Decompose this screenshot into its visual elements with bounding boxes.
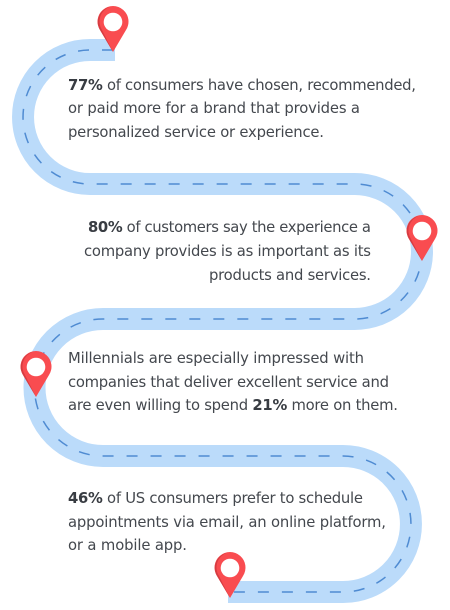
text block: 46% of US consumers: or a mobile app. <box>68 537 187 554</box>
text block: 77% of consumers: personalized service or experience. <box>68 124 324 141</box>
text block: 46% of US consumers <box>68 490 386 554</box>
text block: 46% of US consumers: 46% of US consumers prefer to schedule <box>68 490 363 507</box>
text block: 80% of customers: company provides is as important as its <box>84 243 371 260</box>
text block: 80% of customers: products and services. <box>209 267 371 284</box>
text block: 46% of US consumers: appointments via email, an online platform, <box>68 514 386 531</box>
text block: Millennials: companies that deliver excellent service and <box>68 374 389 391</box>
text block: Millennials: Millennials are especially impressed with <box>68 350 364 367</box>
icon: map pin 3 <box>20 351 52 397</box>
icon: map pin 2 <box>406 215 438 261</box>
text block: 80% of customers: 80% of customers say the experience a <box>88 219 371 236</box>
text block: Millennials: are even willing to spend 21% more on them. <box>68 397 398 414</box>
icon: map pin 4 <box>214 552 246 598</box>
text block: 77% of consumers: 77% of consumers have chosen, recommended, <box>68 77 416 94</box>
text block: 77% of consumers: or paid more for a brand that provides a <box>68 100 360 117</box>
text block: 80% of customers <box>84 219 371 284</box>
icon: map pin 1 <box>98 6 128 52</box>
text block: Millennials <box>68 350 398 414</box>
text block: 77% of consumers <box>68 77 416 141</box>
winding road <box>23 50 422 592</box>
